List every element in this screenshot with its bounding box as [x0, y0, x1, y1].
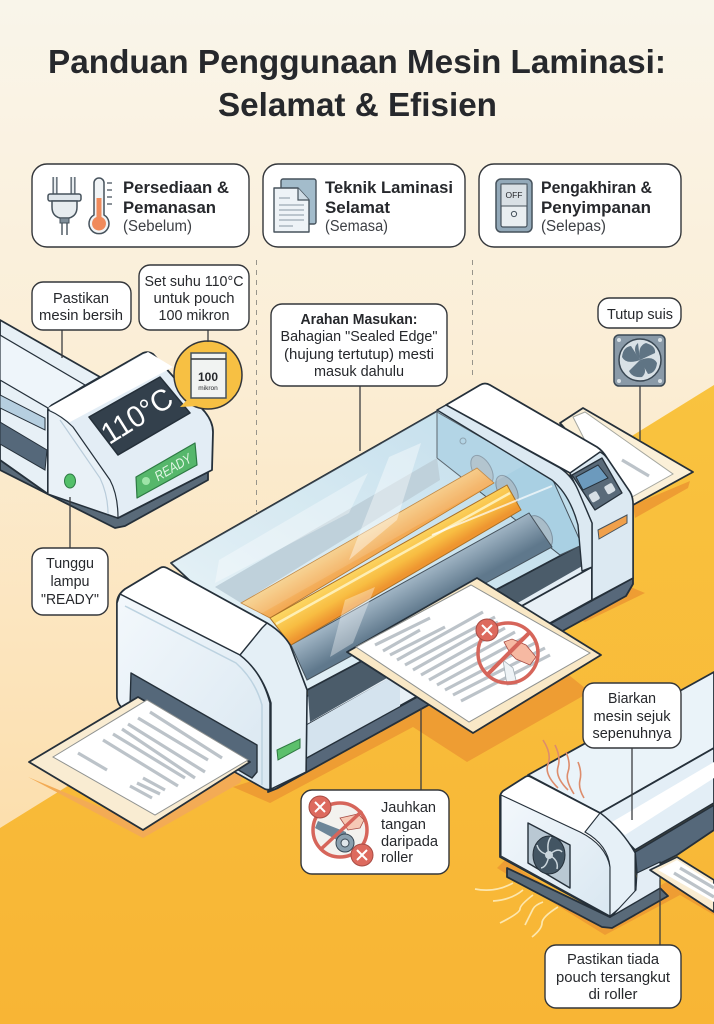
- panel: header after: [479, 164, 681, 247]
- top surface: [528, 672, 714, 813]
- callout: no stuck pouch: di roller: [588, 986, 638, 1003]
- icon: thermometer: [89, 178, 112, 234]
- lower roller: [291, 513, 552, 680]
- icon: documents: [274, 179, 316, 232]
- callout: set temperature: untuk pouch: [154, 290, 234, 307]
- leader lines: [62, 330, 660, 945]
- dark band: [635, 805, 714, 875]
- callout: keep hands away: daripada: [381, 833, 439, 850]
- small machine: pre-heat: [0, 320, 213, 528]
- lower front panel: [300, 540, 592, 761]
- callout: keep hands away: tangan: [381, 816, 426, 833]
- end cap: [48, 352, 213, 518]
- machine base: [268, 578, 633, 792]
- title: Panduan Penggunaan Mesin Laminasi:: [48, 43, 666, 80]
- callout: no stuck pouch: Pastikan tiada: [567, 951, 660, 968]
- title: [48, 43, 666, 123]
- callout: wait for ready: Tunggu: [46, 555, 94, 572]
- pouch in cooling machine: [650, 857, 714, 912]
- icon: 100 mikron bubble: [174, 341, 242, 409]
- icon: fan: [614, 335, 665, 386]
- panel: header after: Pengakhiran &: [541, 178, 652, 197]
- icon: 100 mikron bubble: mikron: [198, 385, 218, 392]
- callout: wait for ready: "READY": [41, 591, 99, 608]
- window glass and back wall: [171, 410, 590, 690]
- side fan: [528, 823, 570, 888]
- callout: wait for ready: [32, 548, 108, 615]
- rear orange roller: [241, 468, 494, 618]
- section dividers: [256, 260, 472, 512]
- panel: header before: Persediaan &: [123, 178, 229, 197]
- icon: off switch: OFF: [506, 190, 522, 200]
- callout: clean machine: [32, 282, 131, 330]
- panel: header before: [32, 164, 249, 247]
- callout: let machine cool: [583, 683, 681, 748]
- main laminating machine: [117, 384, 633, 792]
- glass reflections: [171, 410, 530, 625]
- callout: feed direction: Bahagian "Sealed Edge": [280, 328, 438, 345]
- cooling machine: [475, 672, 714, 937]
- panel: header before: (Sebelum): [123, 218, 192, 235]
- callout: feed direction: [271, 304, 447, 386]
- callout: keep hands away: roller: [381, 849, 413, 866]
- small machine base: [0, 460, 208, 528]
- callout: clean machine: Pastikan: [53, 290, 109, 307]
- shadows under main machine: [28, 481, 690, 838]
- callout: let machine cool: mesin sejuk: [594, 708, 671, 725]
- callout: feed direction: Arahan Masukan:: [300, 311, 418, 328]
- callout: let machine cool: sepenuhnya: [592, 725, 672, 742]
- callout: keep hands away: Jauhkan: [381, 799, 436, 816]
- callout: set temperature: [139, 265, 249, 330]
- callout: set temperature: 100 mikron: [158, 307, 230, 324]
- callout: feed direction: (hujung tertutup) mesti: [284, 346, 434, 363]
- green tag: [277, 739, 300, 760]
- ready plate: READY: [152, 449, 196, 484]
- roller bearings: [466, 452, 558, 553]
- icon: 100 mikron bubble: 100: [198, 370, 218, 384]
- icon: no hand on pouch: [476, 619, 538, 685]
- panel: header after: (Selepas): [541, 218, 606, 235]
- body left part: [0, 320, 100, 494]
- heat waves: [543, 740, 584, 798]
- ready plate: [136, 443, 197, 498]
- front yellow roller: [270, 485, 521, 645]
- icon: no hand near roller: [309, 796, 373, 866]
- panel: header during: [263, 164, 465, 247]
- icon: plug: [48, 177, 81, 235]
- left end cap: [117, 567, 307, 790]
- light band: [600, 748, 714, 850]
- callout: set temperature: Set suhu 110°C: [144, 273, 244, 290]
- green indicator: [64, 474, 76, 488]
- callout: switch off: [598, 298, 681, 328]
- callout: switch off: Tutup suis: [607, 306, 673, 323]
- output pouch: [29, 697, 250, 830]
- title: Selamat & Efisien: [218, 86, 497, 123]
- output slot: [130, 673, 257, 778]
- right end cap: [446, 384, 633, 600]
- base: [507, 868, 668, 928]
- wind lines: [475, 883, 558, 937]
- cooling shadow: [497, 860, 714, 935]
- callout: no stuck pouch: pouch tersangkut: [556, 969, 671, 986]
- orange tag: [598, 515, 627, 539]
- white front strip: [307, 567, 592, 757]
- callout: keep hands away: [301, 790, 449, 874]
- callout: wait for ready: lampu: [50, 573, 90, 590]
- end cap: [500, 776, 637, 917]
- panel: header during: Teknik Laminasi: [325, 178, 453, 197]
- input pouch with warning: [347, 578, 601, 733]
- panel: header during: (Semasa): [325, 218, 388, 235]
- callout: let machine cool: Biarkan: [608, 690, 656, 707]
- icon: off switch: [496, 179, 532, 232]
- back pouch (exit): [560, 408, 693, 505]
- control panel: [572, 458, 622, 510]
- temperature display: 110°C: [95, 382, 179, 451]
- panel: header during: Selamat: [325, 198, 390, 217]
- callout: clean machine: mesin bersih: [39, 307, 123, 324]
- callout: no stuck pouch: [545, 945, 681, 1008]
- panel: header after: Penyimpanan: [541, 198, 651, 217]
- dark floor: [307, 535, 584, 722]
- panel: header before: Pemanasan: [123, 198, 216, 217]
- callout: feed direction: masuk dahulu: [314, 363, 404, 380]
